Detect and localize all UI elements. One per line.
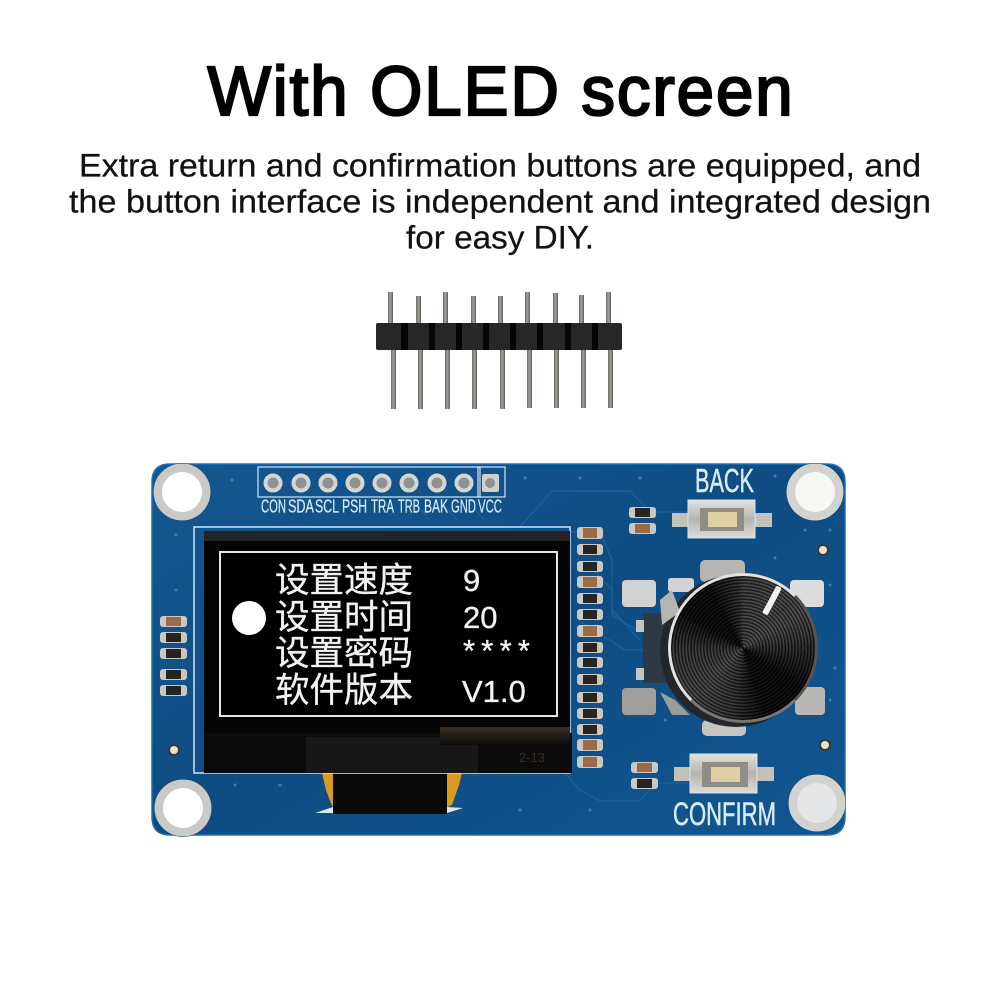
connector labels: VCC <box>478 496 502 516</box>
connector header box <box>258 467 505 497</box>
connector labels: TRB <box>398 496 420 516</box>
CONFIRM button <box>674 754 774 793</box>
lower glass reflection <box>204 727 572 773</box>
vias <box>169 545 830 755</box>
connector labels <box>261 496 502 516</box>
connector labels: GND <box>451 496 476 516</box>
board outline <box>152 464 845 835</box>
SMD components by buttons <box>629 507 658 789</box>
BACK button <box>672 500 772 538</box>
copper traces <box>380 491 690 801</box>
OLED module frame <box>194 527 570 773</box>
OLED menu text: 20 <box>463 600 497 635</box>
connector labels: PSH <box>342 496 367 516</box>
SMD components left <box>160 616 187 696</box>
OLED menu text: V1.0 <box>462 674 526 709</box>
ribbon cable <box>315 773 463 814</box>
OLED menu text: 软件版本 <box>275 672 413 710</box>
OLED menu text <box>275 562 530 710</box>
encoder body <box>636 575 812 727</box>
connector labels: TRA <box>371 496 394 516</box>
lower glass reflection: 2-13 <box>519 750 545 765</box>
rotary knob <box>668 573 818 723</box>
knob indicator mark <box>762 585 782 616</box>
circuit board <box>152 462 846 837</box>
pin header <box>376 292 622 409</box>
OLED menu text: 9 <box>463 563 480 598</box>
description text: Extra return and confirmation buttons are equipped, and <box>79 148 921 184</box>
description text <box>69 148 931 256</box>
connector labels: SDA <box>288 496 314 516</box>
OLED menu text: 设置密码 <box>275 635 413 673</box>
description text: the button interface is independent and integrated design <box>69 184 931 220</box>
menu selector dot <box>232 601 266 635</box>
OLED glass <box>204 531 570 773</box>
connector labels: SCL <box>315 496 339 516</box>
connector labels: BAK <box>424 496 448 516</box>
BACK label: BACK <box>695 462 754 499</box>
OLED menu text: 设置速度 <box>275 562 413 600</box>
SMD components column <box>577 527 603 768</box>
encoder pads <box>622 560 825 736</box>
description text: for easy DIY. <box>406 220 594 256</box>
small vias <box>174 474 836 812</box>
mounting holes <box>153 463 846 837</box>
CONFIRM label: CONFIRM <box>673 796 776 832</box>
connector labels: CON <box>261 496 286 516</box>
title: With OLED screen <box>207 52 795 130</box>
OLED menu text: 设置时间 <box>275 599 413 637</box>
OLED display frame <box>220 552 557 716</box>
OLED menu text: **** <box>463 633 530 668</box>
